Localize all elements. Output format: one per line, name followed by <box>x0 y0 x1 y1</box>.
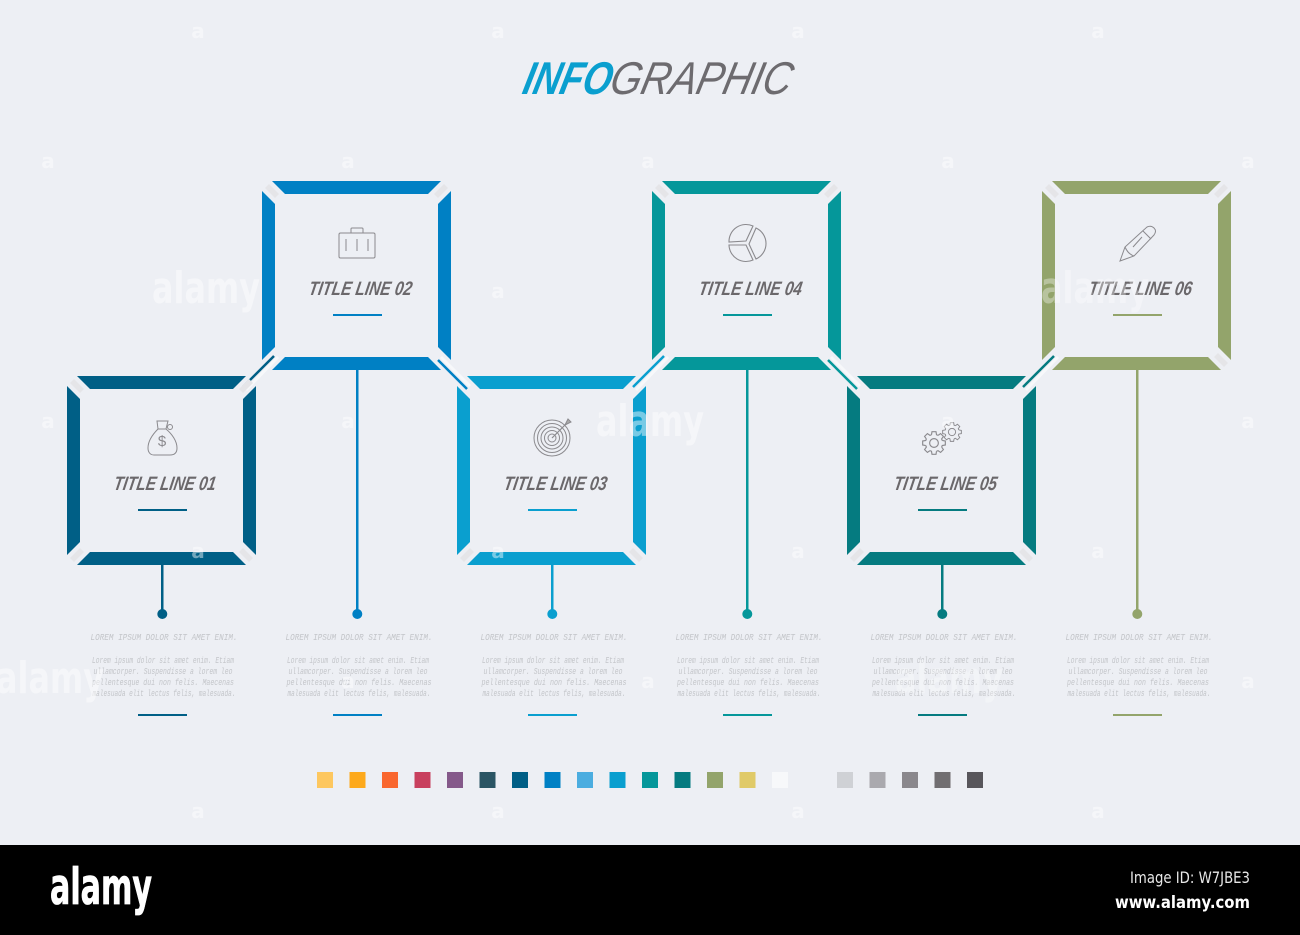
title <box>519 53 799 104</box>
panel: step 02 <box>262 181 451 716</box>
underline 02 <box>333 314 382 316</box>
watermark marks: a <box>41 409 55 433</box>
frame 06 <box>1042 181 1231 370</box>
text block 04: LOREM IPSUM DOLOR SIT AMET ENIM. <box>676 633 822 643</box>
text block 02: Lorem ipsum dolor sit amet enim. Etiam <box>287 656 429 666</box>
watermark marks: a <box>491 799 505 823</box>
watermark marks: alamy <box>1041 263 1149 314</box>
text block 05: malesuada elit lectus felis, malesuada. <box>872 689 1016 699</box>
step title 01: TITLE LINE 01 <box>112 473 218 495</box>
text block 05 <box>870 633 1018 699</box>
step title 02: TITLE LINE 02 <box>307 278 414 300</box>
bottom rule 05 <box>918 714 967 716</box>
icon: pie chart <box>729 224 766 262</box>
text block 05: LOREM IPSUM DOLOR SIT AMET ENIM. <box>870 633 1018 643</box>
footer bar <box>0 845 1300 935</box>
bottom rule 02 <box>333 714 382 716</box>
text block 04: Lorem ipsum dolor sit amet enim. Etiam <box>677 656 819 666</box>
bottom rule 01 <box>138 714 187 716</box>
text block 04: pellentesque dui non felis. Maecenas <box>676 678 819 688</box>
stem and dot 02 <box>352 370 362 619</box>
text block 06: pellentesque dui non felis. Maecenas <box>1066 678 1209 688</box>
connector 3 to 4 <box>633 356 668 390</box>
watermark marks: a <box>491 279 505 303</box>
title: INFO <box>519 53 619 104</box>
watermark marks: a <box>941 149 955 173</box>
text block 03: malesuada elit lectus felis, malesuada. <box>482 689 626 699</box>
underline 03 <box>528 509 577 511</box>
connector 4 to 5 <box>828 357 860 389</box>
watermark marks: a <box>191 799 205 823</box>
stem and dot 04 <box>742 370 752 619</box>
text block 02: LOREM IPSUM DOLOR SIT AMET ENIM. <box>286 633 432 643</box>
text block 06: LOREM IPSUM DOLOR SIT AMET ENIM. <box>1066 633 1212 643</box>
text block 03 <box>480 633 628 699</box>
watermark marks: alamy <box>895 653 1003 704</box>
watermark marks: alamy <box>0 653 104 704</box>
watermark marks: a <box>1241 669 1255 693</box>
stem and dot 05 <box>937 565 947 619</box>
step title 04: TITLE LINE 04 <box>697 278 804 300</box>
text block 01: LOREM IPSUM DOLOR SIT AMET ENIM. <box>90 633 238 643</box>
text block 01 <box>90 633 238 699</box>
frame 02 <box>262 181 451 370</box>
watermark marks: alamy <box>596 396 704 447</box>
text block 01: ullamcorper. Suspendisse a lorem leo <box>94 667 232 677</box>
text block 01: pellentesque dui non felis. Maecenas <box>91 678 234 688</box>
icon: target <box>534 419 571 456</box>
text block 01: Lorem ipsum dolor sit amet enim. Etiam <box>92 656 234 666</box>
text block 04: malesuada elit lectus felis, malesuada. <box>678 689 820 699</box>
watermark marks: a <box>191 539 205 563</box>
text block 02: malesuada elit lectus felis, malesuada. <box>288 689 430 699</box>
underline 01 <box>138 509 187 511</box>
watermark marks: a <box>341 149 355 173</box>
underline 06 <box>1113 314 1162 316</box>
icon: gears <box>923 423 961 454</box>
icon: pen <box>1120 226 1156 261</box>
underline 05 <box>918 509 967 511</box>
stem and dot 06 <box>1132 370 1142 619</box>
text block 06: ullamcorper. Suspendisse a lorem leo <box>1068 667 1208 677</box>
watermark marks: a <box>1241 409 1255 433</box>
text block 05: Lorem ipsum dolor sit amet enim. Etiam <box>872 656 1014 666</box>
watermark marks: a <box>1091 799 1105 823</box>
step title 06: TITLE LINE 06 <box>1087 278 1195 300</box>
website: www.alamy.com <box>1115 893 1250 913</box>
text block 02: pellentesque dui non felis. Maecenas <box>286 678 432 688</box>
watermark marks: a <box>791 539 805 563</box>
watermark marks: a <box>641 669 655 693</box>
watermark marks: a <box>1091 539 1105 563</box>
watermark marks: a <box>341 409 355 433</box>
icon: briefcase <box>339 228 375 258</box>
text block 03: LOREM IPSUM DOLOR SIT AMET ENIM. <box>480 633 628 643</box>
frame 03 <box>457 376 646 565</box>
panel: step 01 <box>67 376 256 716</box>
panel: step 03 <box>457 376 646 716</box>
connector 2 to 3 <box>438 357 470 389</box>
watermark marks: a <box>941 409 955 433</box>
watermark marks: a <box>41 149 55 173</box>
step title 05: TITLE LINE 05 <box>892 473 1000 495</box>
text block 05: pellentesque dui non felis. Maecenas <box>871 678 1014 688</box>
text block 02: ullamcorper. Suspendisse a lorem leo <box>288 667 428 677</box>
panel: step 05 <box>847 376 1036 716</box>
image id: Image ID: W7JBE3 <box>1130 868 1250 887</box>
panel: step 04 <box>652 181 841 716</box>
watermark marks: a <box>791 799 805 823</box>
stem and dot 01 <box>157 565 167 619</box>
icon: money bag <box>148 421 177 455</box>
bottom rule 06 <box>1113 714 1162 716</box>
watermark marks: a <box>1241 149 1255 173</box>
panel: step 06 <box>1042 181 1231 716</box>
text block 06: malesuada elit lectus felis, malesuada. <box>1068 689 1210 699</box>
step title 03: TITLE LINE 03 <box>502 473 609 495</box>
watermark marks: a <box>491 19 505 43</box>
bottom rule 03 <box>528 714 577 716</box>
text block 03: Lorem ipsum dolor sit amet enim. Etiam <box>482 656 624 666</box>
bottom rule 04 <box>723 714 772 716</box>
text block 03: pellentesque dui non felis. Maecenas <box>481 678 626 688</box>
watermark marks: a <box>1091 19 1105 43</box>
connector 1 to 2 <box>243 356 278 390</box>
frame 04 <box>652 181 841 370</box>
footer logo: alamy <box>50 858 152 916</box>
text block 02 <box>286 633 432 699</box>
text block 03: ullamcorper. Suspendisse a lorem leo <box>484 667 622 677</box>
connector 5 to 6 <box>1023 356 1058 390</box>
text block 04: ullamcorper. Suspendisse a lorem leo <box>678 667 818 677</box>
underline 04 <box>723 314 772 316</box>
frame 01 <box>67 376 256 565</box>
stem and dot 03 <box>547 565 557 619</box>
colour palette swatches <box>317 772 983 788</box>
text block 06: Lorem ipsum dolor sit amet enim. Etiam <box>1067 656 1209 666</box>
frame 05 <box>847 376 1036 565</box>
icon: money bag: $ <box>158 433 167 450</box>
watermark marks: a <box>491 539 505 563</box>
watermark marks: a <box>641 149 655 173</box>
watermark marks: alamy <box>152 263 260 314</box>
title: GRAPHIC <box>606 53 799 104</box>
watermark marks: a <box>341 669 355 693</box>
watermark marks: a <box>191 19 205 43</box>
text block 05: ullamcorper. Suspendisse a lorem leo <box>874 667 1012 677</box>
text block 06 <box>1066 633 1212 699</box>
watermark marks: a <box>791 19 805 43</box>
text block 04 <box>676 633 822 699</box>
text block 01: malesuada elit lectus felis, malesuada. <box>92 689 236 699</box>
